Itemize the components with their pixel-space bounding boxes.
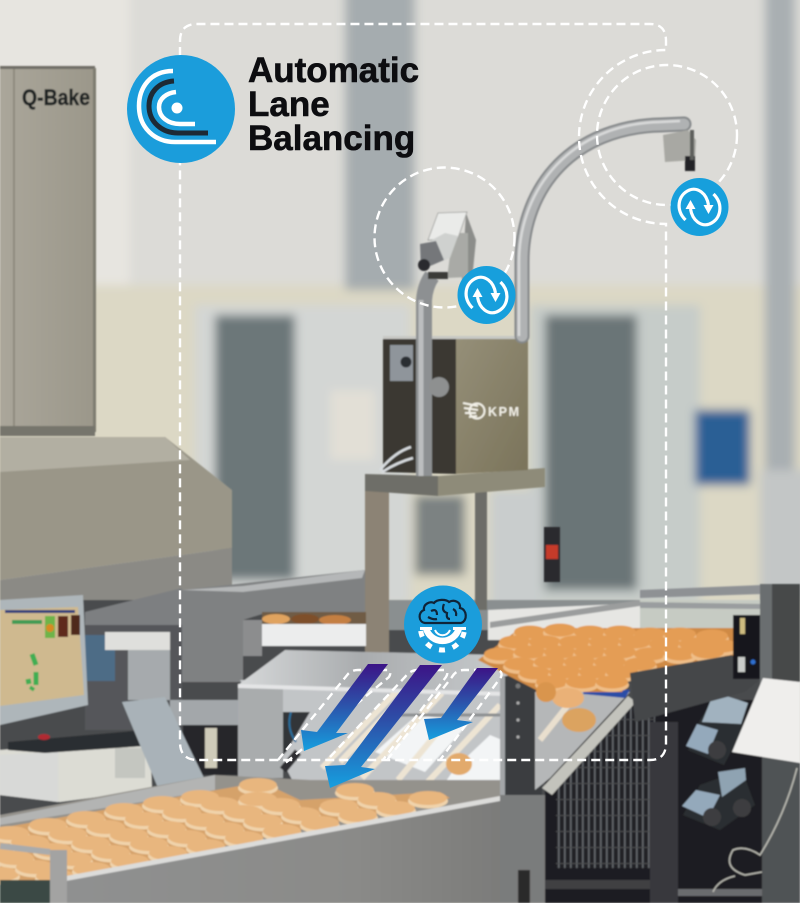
dark side post [500,668,542,802]
right dark machinery base [545,680,800,903]
paper sheet [732,678,800,763]
black sensor box [733,615,760,679]
gear half [426,628,459,641]
label: Q-Bake: Q-Bake [22,85,90,110]
dashed circle around left camera [374,168,514,308]
backdrop behind the middle machine [365,600,640,630]
title: Lane [248,85,330,124]
title: Balancing [248,119,415,158]
back wall gap at right [600,600,765,640]
icon: sync badge left camera [458,266,516,324]
stand with shelf [365,468,545,660]
arrow: right lane [424,668,498,740]
clipboard [122,697,207,790]
icon: sync badge overhead camera [670,178,728,236]
dark lower scene base [0,600,800,903]
conveyor side plate [630,655,760,722]
dashed lane outlines [278,670,502,765]
left machinery [85,588,240,775]
top hood plate [238,650,512,694]
white cable [713,768,797,892]
back table [488,603,640,640]
arrow: middle lane [325,665,442,788]
gear motors [682,692,755,830]
icon: lane balancing logo [127,55,235,163]
KPM logo [463,403,521,419]
brain outline [420,600,466,623]
support pipe [424,276,432,476]
knob [429,377,449,397]
cooling fan [390,345,413,381]
dashed frame around the system [180,24,666,760]
dashed circle around overhead camera [597,65,737,205]
machine: Q-Bake cabinet [0,66,96,436]
back conveyor with orange buns [478,624,739,708]
machine: oven hood [0,437,232,618]
left camera with hood [418,212,476,280]
wire mesh guard [556,700,655,868]
chute bed with lanes [238,650,512,795]
beacon light [544,527,560,582]
middle machine housing [182,570,366,682]
arrow: left lane [301,664,388,751]
computer monitor [0,595,88,725]
upper right rail frame [640,584,800,684]
control box with KPM logo [380,276,529,476]
overhead camera bracket [663,130,696,171]
front conveyor with buns [0,775,500,886]
curved camera arm [519,121,684,336]
cables [380,447,413,472]
icon: brain and gear badge [404,586,482,664]
computer unit with keyboard [0,730,152,802]
KPM logo: KPM [488,405,521,419]
sloped transfer belt [535,686,636,795]
front conveyor side panel [0,795,545,903]
title: Automatic [248,51,419,90]
